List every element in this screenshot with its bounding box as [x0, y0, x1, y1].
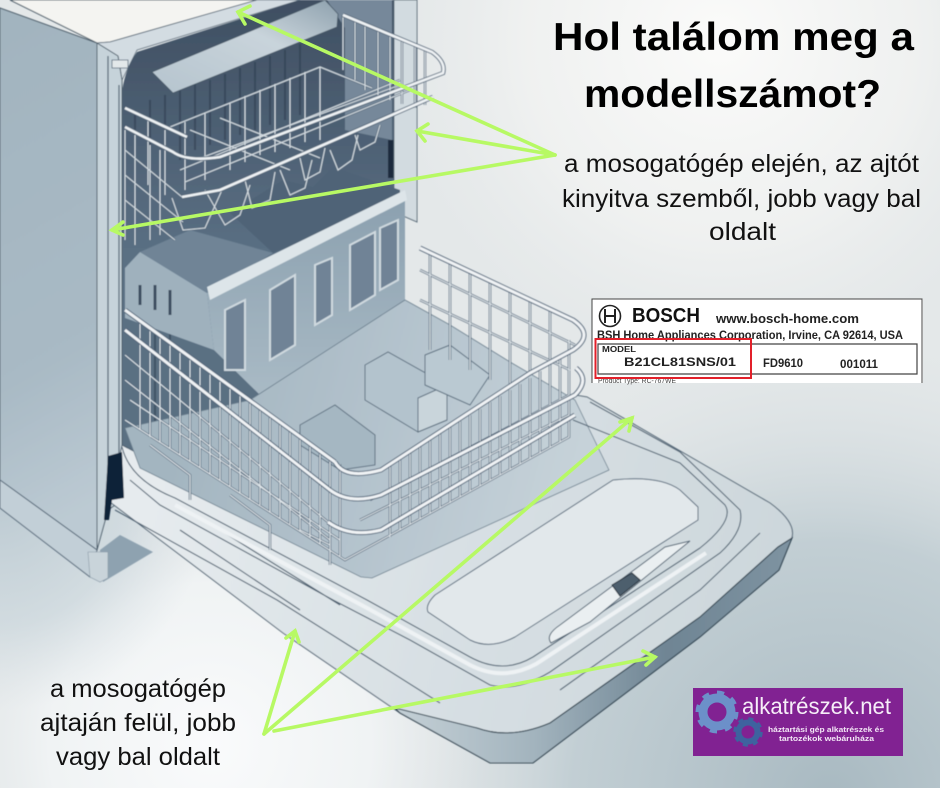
chamber floor	[125, 300, 609, 578]
icon: large gear	[698, 693, 736, 731]
logo name: alkatrészek.net	[742, 693, 892, 719]
text: front location: kinyitva szemből, jobb vagy bal	[562, 185, 921, 213]
product type: Product Type: RC-767WE	[598, 378, 676, 385]
logo tagline: háztartási gép alkatrészek és	[768, 725, 884, 734]
code two: 001011	[840, 357, 878, 371]
arrow to door top corner	[264, 418, 632, 734]
lower basket	[125, 248, 584, 565]
tub block	[125, 190, 407, 395]
company line: BSH Home Appliances Corporation, Irvine, CA 92614, USA	[597, 330, 903, 342]
model label: MODEL	[602, 345, 636, 354]
door thickness	[395, 538, 792, 763]
brand: BOSCH	[632, 305, 700, 327]
model number: B21CL81SNS/01	[624, 355, 736, 369]
red highlight	[596, 339, 751, 378]
text: front location: a mosogatógép elején, az ajtót	[564, 150, 919, 178]
title	[553, 16, 914, 116]
door handle recess	[549, 541, 690, 643]
cabinet front frame left	[97, 43, 128, 550]
cabinet side panel	[0, 8, 97, 550]
text: door location: ajtaján felül, jobb	[40, 709, 236, 737]
door rim lines	[115, 402, 760, 703]
cabinet front frame right	[394, 0, 417, 222]
text: door location: vagy bal oldalt	[56, 743, 220, 771]
door inner panel	[427, 479, 698, 644]
website: www.bosch-home.com	[715, 312, 859, 326]
title: Hol találom meg a	[553, 16, 914, 59]
arrows: front frame locations	[112, 6, 555, 235]
model box	[598, 344, 917, 374]
door latch	[612, 573, 640, 596]
right upper wall	[327, 0, 392, 140]
model plate	[592, 299, 923, 385]
interior upper chamber	[120, 0, 405, 500]
logo tagline	[768, 725, 884, 743]
title: modellszámot?	[584, 73, 881, 116]
icon: small gear	[735, 719, 761, 745]
arrow to left frame	[112, 155, 555, 235]
arrow to door right edge	[274, 651, 655, 731]
door rim highlight	[175, 505, 706, 673]
plate background	[592, 299, 923, 383]
cabinet plinth	[0, 480, 153, 582]
logo background	[693, 688, 903, 756]
logo	[693, 688, 903, 756]
cabinet top surface	[10, 0, 257, 43]
arrow to right frame	[417, 124, 555, 155]
door upper surface	[110, 395, 792, 733]
dark hinge gap	[104, 452, 124, 520]
code one: FD9610	[763, 356, 803, 370]
interior back wall streaks	[135, 44, 300, 440]
arrow to door left edge	[264, 631, 299, 734]
arrows: door locations	[264, 418, 655, 734]
Bosch logo mark	[600, 306, 620, 326]
detergent box	[300, 345, 490, 470]
tub block back top faces	[230, 167, 400, 253]
dark slit	[388, 140, 398, 178]
text: front location	[562, 150, 921, 246]
door frame top	[97, 0, 300, 80]
ceiling duct	[152, 0, 338, 93]
arrow to top frame	[238, 6, 555, 155]
logo tagline: tartozékok webáruháza	[779, 734, 875, 743]
text: door location	[40, 675, 236, 771]
text: door location: a mosogatógép	[50, 675, 226, 703]
text: front location: oldalt	[709, 218, 776, 246]
upper basket	[125, 15, 444, 245]
